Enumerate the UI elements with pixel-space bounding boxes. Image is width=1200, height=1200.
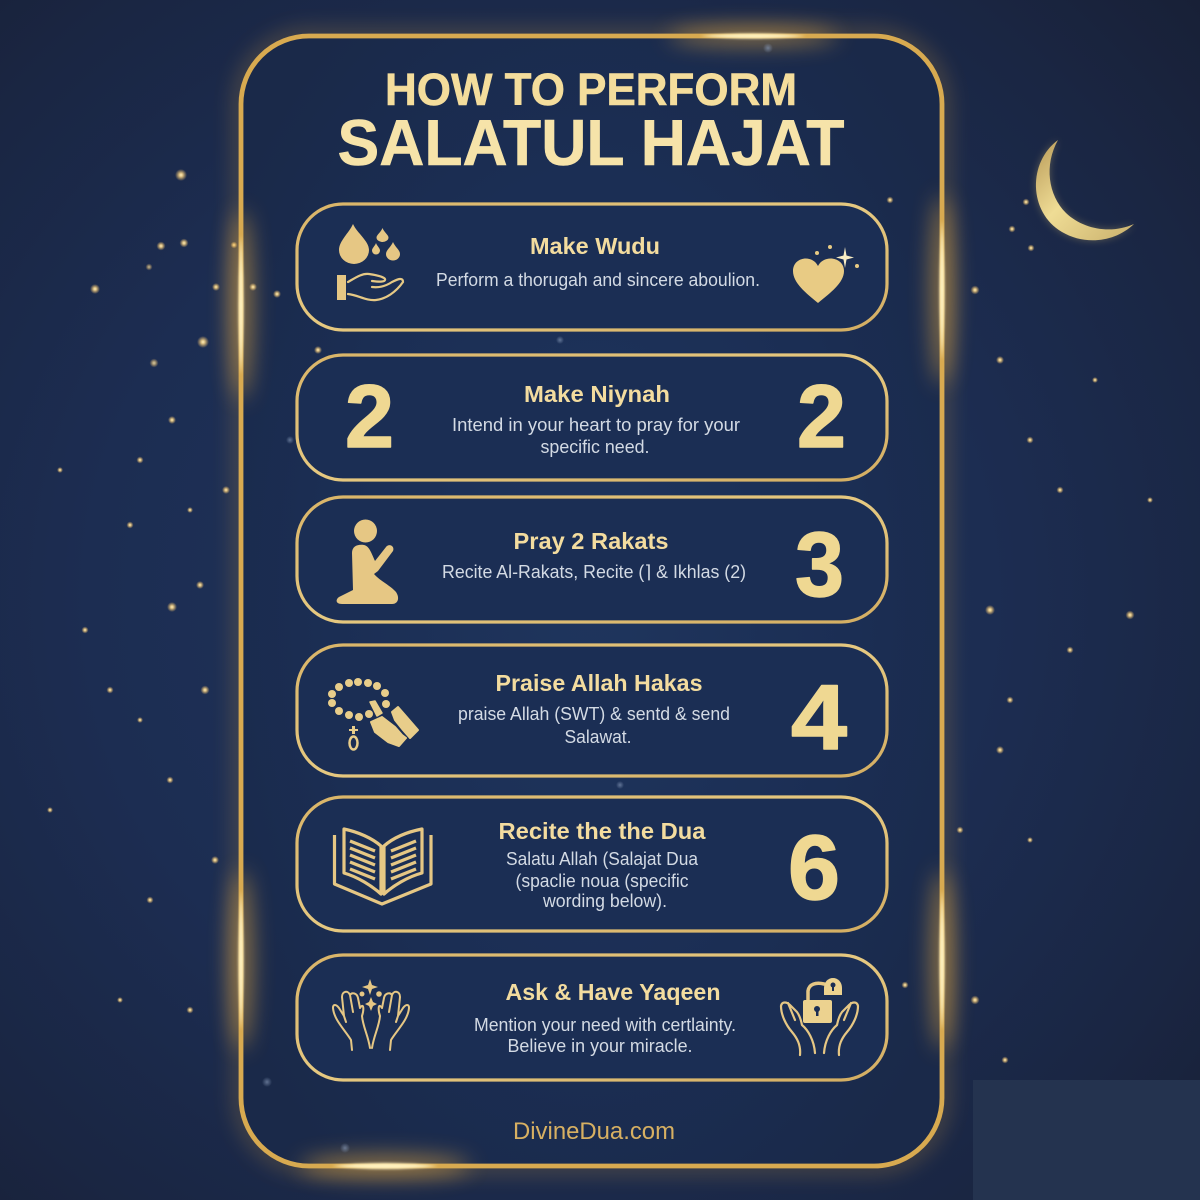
panel: step 6 ask and have yaqeen bbox=[297, 955, 887, 1080]
step description: Salatu Allah (Salajat Dua bbox=[506, 849, 699, 869]
step title: Ask & Have Yaqeen bbox=[506, 979, 720, 1005]
step description: Believe in your miracle. bbox=[508, 1036, 692, 1056]
number right: 4 bbox=[791, 667, 847, 769]
step description: Intend in your heart to pray for your bbox=[452, 415, 740, 435]
step description: specific need. bbox=[540, 437, 650, 457]
panel: step 1 make wudu bbox=[297, 204, 887, 330]
number left: 2 bbox=[345, 366, 394, 466]
step description: Salawat. bbox=[564, 727, 632, 747]
icon: water drops and hand bbox=[337, 224, 403, 300]
number right: 6 bbox=[788, 817, 840, 919]
icon: crescent moon bbox=[1036, 140, 1134, 240]
step title: Make Niynah bbox=[524, 381, 670, 407]
step description: Recite Al-Rakats, Recite (⌉ & Ikhlas (2) bbox=[442, 562, 746, 582]
title: HOW TO PERFORM bbox=[385, 64, 797, 115]
icon: open hands with sparkles bbox=[333, 979, 409, 1050]
step description: (spaclie noua (specific bbox=[516, 871, 688, 891]
step description: praise Allah (SWT) & sentd & send bbox=[458, 704, 730, 724]
bottom right patch bbox=[973, 1080, 1200, 1200]
panel: main frame bbox=[230, 27, 953, 1177]
panel: step 2 make niynah bbox=[297, 355, 887, 480]
panel: step 4 praise allah bbox=[297, 645, 887, 776]
step title: Recite the the Dua bbox=[498, 818, 706, 844]
step description: Mention your need with certlainty. bbox=[474, 1015, 736, 1035]
panel: panel sparkles bbox=[249, 43, 908, 1153]
step description bbox=[506, 849, 699, 911]
number right: 3 bbox=[795, 514, 844, 616]
icon: heart with sparkles bbox=[793, 245, 859, 303]
icon: kneeling figure bbox=[337, 520, 398, 604]
icon: prayer beads and hands bbox=[328, 678, 418, 750]
panel: step 5 recite the dua bbox=[297, 797, 887, 931]
step description bbox=[474, 1015, 736, 1056]
step title: Pray 2 Rakats bbox=[514, 528, 668, 554]
footer website: DivineDua.com bbox=[513, 1118, 675, 1145]
title bbox=[338, 64, 844, 179]
icon: open book bbox=[334, 829, 431, 904]
step description: wording below). bbox=[542, 891, 667, 911]
step description bbox=[452, 415, 740, 457]
icon: hands holding padlock bbox=[781, 978, 858, 1055]
panel: step 3 pray 2 rakats bbox=[297, 497, 887, 622]
title: SALATUL HAJAT bbox=[338, 106, 844, 179]
step description: Perform a thorugah and sincere aboulion. bbox=[436, 270, 760, 290]
step title: Praise Allah Hakas bbox=[496, 670, 702, 696]
number right: 2 bbox=[797, 366, 846, 466]
starfield bbox=[47, 169, 1153, 1064]
step title: Make Wudu bbox=[530, 233, 660, 259]
step description bbox=[458, 704, 730, 747]
frame highlights bbox=[238, 34, 944, 1169]
frame glow patches bbox=[230, 27, 953, 1177]
